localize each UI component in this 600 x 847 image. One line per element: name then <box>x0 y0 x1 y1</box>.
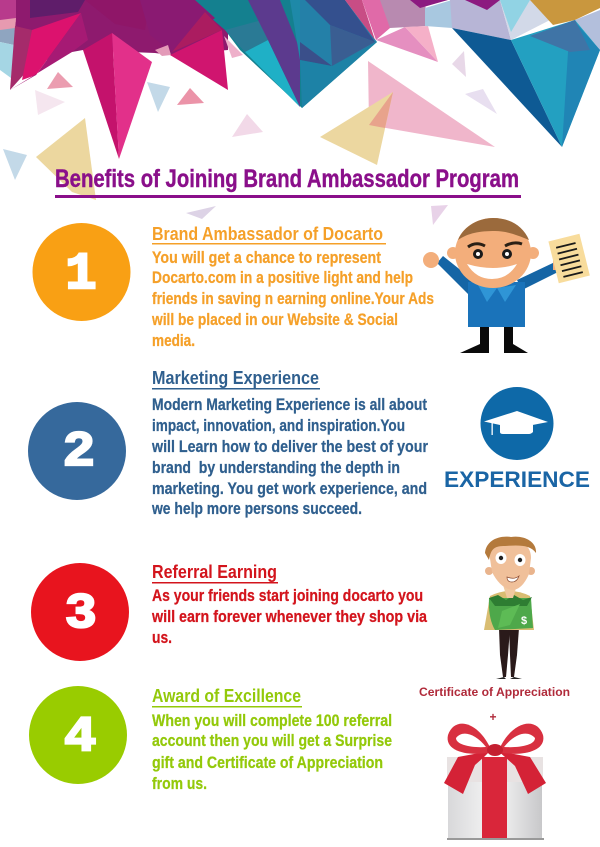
step 1 text: You will get a chance to represent <box>152 248 381 267</box>
step 2 text: we help more persons succeed. <box>151 499 362 518</box>
step 1 text: will be placed in our Website & Social <box>151 310 398 329</box>
header: polygon artwork <box>0 0 600 159</box>
step 2 text: Marketing Experience <box>152 368 319 388</box>
scattered triangles <box>3 51 497 225</box>
step 3 text <box>151 562 427 647</box>
step 4 text: account then you will get a Surprise <box>152 731 392 750</box>
step 1 badge: 1 <box>65 245 97 304</box>
icon: graduation cap experience <box>444 387 590 492</box>
step 1 text: media. <box>152 331 195 350</box>
step 3 text: As your friends start joining docarto you <box>152 586 423 605</box>
step 4 text <box>152 686 392 793</box>
step 3 text: us. <box>152 628 172 647</box>
step 1 text <box>151 224 434 350</box>
step 1 text: friends in saving n earning online.Your Ads <box>152 289 434 308</box>
step 4 badge: 4 <box>65 707 95 760</box>
icon: graduation cap experience: EXPERIENCE <box>444 467 590 492</box>
step 3 badge: 3 <box>66 584 96 637</box>
step 1 text: Docarto.com in a positive light and help <box>152 268 413 287</box>
step 1 text: Brand Ambassador of Docarto <box>152 224 383 244</box>
plus sign: + <box>489 710 497 724</box>
step 2 text: brand by understanding the depth in <box>152 458 400 477</box>
step 2 text: Modern Marketing Experience is all about <box>152 395 427 414</box>
icon: man with money bag <box>484 537 536 679</box>
step 4 text: Award of Excillence <box>152 686 301 706</box>
step 2 text: impact, innovation, and inspiration.You <box>152 416 405 435</box>
step 3 text: will earn forever whenever they shop via <box>151 607 427 626</box>
step 2 text: will Learn how to deliver the best of your <box>151 437 428 456</box>
step 2 badge <box>28 402 126 500</box>
step 2 text <box>151 368 428 518</box>
step 2 text: marketing. You get work experience, and <box>152 479 427 498</box>
step 3 badge <box>31 563 129 661</box>
step 4 text: from us. <box>152 774 207 793</box>
certificate of appreciation label: Certificate of Appreciation <box>419 685 570 699</box>
step 4 text: gift and Certificate of Appreciation <box>152 753 383 772</box>
step 4 text: When you will complete 100 referral <box>152 711 392 730</box>
icon: ambassador character <box>423 218 590 353</box>
step 3 text: Referral Earning <box>152 562 277 582</box>
step 2 badge: 2 <box>64 422 94 475</box>
icon: man with money bag: $ <box>521 615 527 627</box>
icon: gift box <box>444 724 546 840</box>
step 1 badge <box>32 223 130 321</box>
step 4 badge <box>29 686 127 784</box>
